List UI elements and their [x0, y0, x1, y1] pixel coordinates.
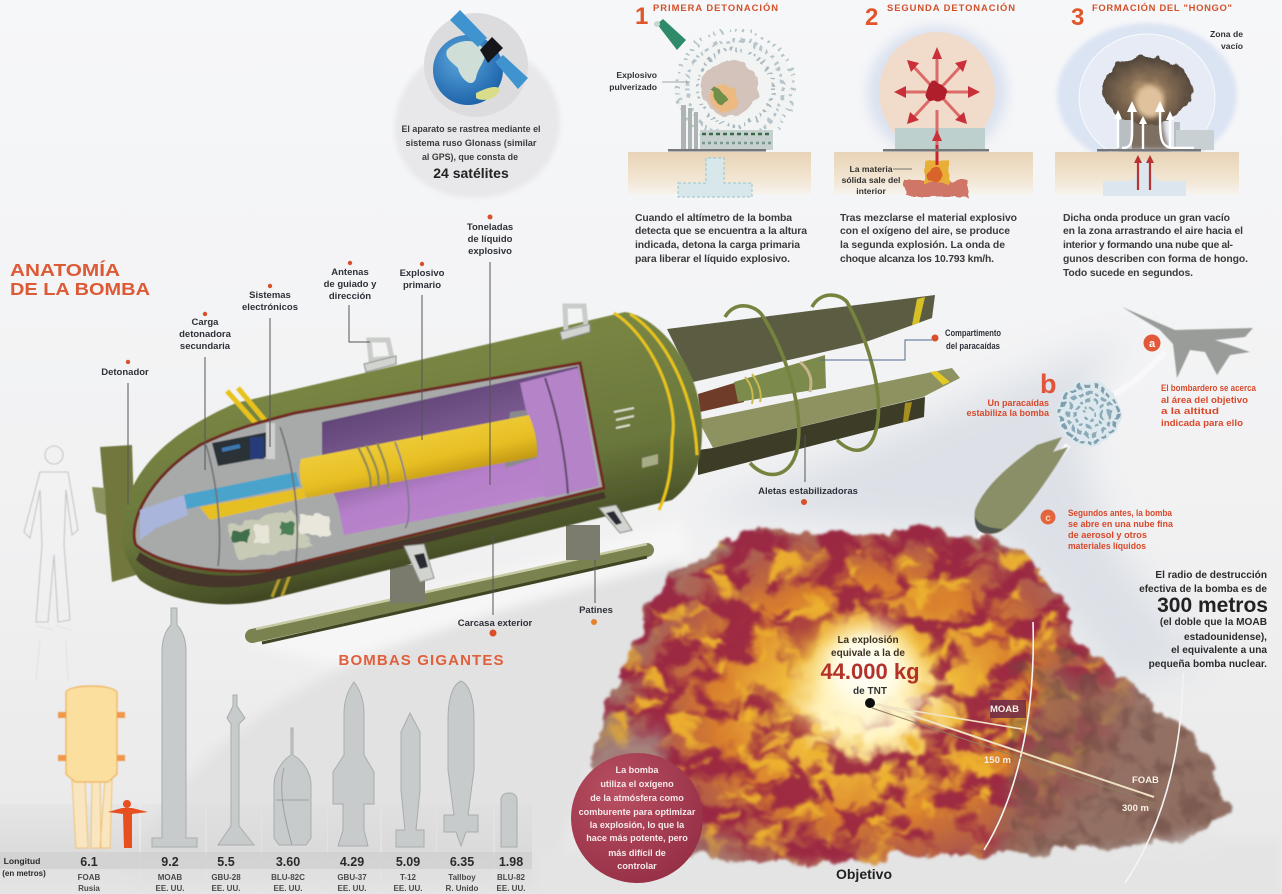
label: zona de vacío: Zona de — [1210, 29, 1243, 39]
text b: estabiliza la bomba — [966, 408, 1050, 418]
table labels: GBU-28 — [211, 873, 241, 882]
explosion text — [820, 635, 920, 697]
title: ANATOMÍA — [10, 259, 120, 280]
callout: radius of destruction: 300 metros — [1157, 594, 1268, 617]
underground vacuum — [1103, 155, 1186, 196]
callout: oxygen disc: La bomba — [616, 765, 659, 775]
text a: a la altitud — [1161, 406, 1219, 416]
bomb: small — [501, 793, 517, 847]
table labels: Rusia — [78, 884, 100, 893]
table labels: 6.1 — [80, 855, 98, 869]
ground section — [1055, 152, 1239, 195]
text: segunda detonación: Tras mezclarse el material explosivo — [840, 213, 1017, 224]
satellite text: El aparato se rastrea mediante el — [402, 123, 540, 134]
satellite text — [402, 123, 540, 181]
text a: al área del objetivo — [1161, 395, 1249, 405]
text: formación del hongo: en la zona arrastrando el aire hacia el — [1063, 226, 1243, 237]
callout: radius of destruction: El radio de destrucción — [1155, 570, 1267, 581]
base haze — [590, 830, 1230, 870]
text: formación del hongo: interior y formando una nube que al- — [1063, 240, 1234, 251]
text c — [1068, 508, 1174, 551]
text b — [966, 398, 1050, 418]
table labels: EE. UU. — [338, 884, 366, 893]
heading 2: 2 — [865, 4, 878, 31]
label: zona de vacío: vacío — [1221, 41, 1243, 51]
bomb: inner wall band — [136, 492, 606, 587]
panel: formación del hongo — [1055, 2, 1248, 279]
label: toneladas: Toneladas — [467, 222, 513, 233]
label: objetivo: Objetivo — [836, 866, 892, 882]
label: explosivo pulverizado — [609, 70, 690, 92]
tail: central tube — [698, 380, 744, 412]
callout: oxygen disc: de la atmósfera como — [590, 793, 684, 803]
callouts: bomb parts — [101, 214, 1001, 636]
label: toneladas: de líquido — [468, 234, 513, 245]
text a: El bombardero se acerca — [1161, 383, 1257, 393]
table labels: EE. UU. — [497, 884, 525, 893]
bomb: GBU-43 style — [333, 682, 374, 846]
text: primera detonación: para liberar el líquido explosivo. — [635, 254, 790, 265]
text: formación del hongo: Todo sucede en segundos. — [1063, 268, 1193, 279]
label: toneladas — [467, 214, 513, 257]
table labels — [2, 855, 526, 893]
title — [10, 259, 150, 299]
label: antenas: Antenas — [331, 267, 369, 278]
bomb: ribs — [206, 427, 297, 566]
label: aletas — [758, 486, 858, 505]
explosion text: de TNT — [853, 686, 887, 697]
blast core — [804, 608, 928, 732]
text: segunda detonación: la segunda explosión. La onda de — [840, 240, 1005, 251]
tail: lower fin — [698, 368, 960, 448]
table labels: T-12 — [400, 873, 417, 882]
illustration: explosion — [589, 522, 1234, 884]
label: antenas: dirección — [329, 291, 371, 302]
bomb: FOAB — [58, 686, 125, 848]
panel: primera detonación — [609, 2, 811, 265]
underground bunker — [678, 158, 752, 197]
bomb: lugs — [364, 306, 632, 582]
ground section — [834, 152, 1033, 195]
bombas gigantes comparison — [0, 608, 532, 894]
table labels: Longitud — [4, 856, 40, 866]
underground blast — [905, 160, 969, 197]
label: carga detonadora: secundaria — [180, 341, 231, 352]
label: toneladas: explosivo — [468, 246, 512, 257]
panel: segunda detonación — [834, 2, 1033, 265]
text: segunda detonación: choque alcanza los 10.793 km/h. — [840, 254, 994, 265]
text: segunda detonación — [840, 213, 1017, 265]
label: explosivo pulverizado: Explosivo — [616, 70, 657, 80]
table labels: BLU-82C — [271, 873, 305, 882]
label: materia: La materia — [850, 164, 893, 174]
heading 3: FORMACIÓN DEL "HONGO" — [1092, 2, 1232, 13]
badge c: c — [1045, 513, 1051, 524]
heading 2 — [865, 2, 1015, 31]
table labels: 1.98 — [499, 855, 523, 869]
table labels: 3.60 — [276, 855, 300, 869]
bomb: nose plate — [100, 445, 136, 582]
illustration: fireball with shock arrows — [867, 26, 1007, 190]
text: formación del hongo: Dicha onda produce un gran vacío — [1063, 213, 1230, 224]
title: DE LA BOMBA — [10, 279, 150, 299]
table labels: 4.29 — [340, 855, 364, 869]
callout: oxygen disc: comburente para optimizar — [579, 807, 696, 817]
label: patines — [579, 605, 613, 625]
label: carga detonadora: detonadora — [179, 329, 232, 340]
bomb: T-12 — [396, 713, 424, 847]
satellite text: 24 satélites — [433, 165, 509, 181]
radius labels: 300 m — [1122, 803, 1149, 814]
pale disc behind satellite text — [395, 42, 560, 198]
illustration: stabilizer tail — [667, 295, 960, 475]
label: explosivo primario: Explosivo — [400, 268, 445, 279]
bomb: rear markings — [614, 408, 634, 428]
text c: de aerosol y otros — [1068, 530, 1147, 540]
bomb: MOAB — [152, 608, 197, 847]
label: explosivo pulverizado: pulverizado — [609, 82, 657, 92]
table labels: GBU-37 — [337, 873, 367, 882]
satellite text: al GPS), que consta de — [422, 151, 518, 162]
illustration: skid rail — [252, 525, 647, 643]
heading 3: 3 — [1071, 4, 1084, 31]
buildings — [681, 105, 773, 150]
table labels: (en metros) — [2, 869, 46, 878]
table labels: FOAB — [78, 873, 101, 882]
text a — [1161, 383, 1257, 428]
heading: BOMBAS GIGANTES — [338, 652, 504, 669]
icon: satellite — [450, 10, 528, 89]
bomb: cutaway interior — [134, 363, 604, 571]
table labels: EE. UU. — [156, 884, 184, 893]
bomb: rear yellow bands — [614, 313, 673, 510]
text: primera detonación: Cuando el altímetro de la bomba — [635, 213, 792, 224]
explosion text: 44.000 kg — [820, 659, 920, 684]
callout: oxygen disc — [571, 753, 703, 883]
heading 2: SEGUNDA DETONACIÓN — [887, 2, 1015, 13]
table labels: 5.5 — [217, 855, 235, 869]
label: aletas: Aletas estabilizadoras — [758, 486, 858, 497]
callout: radius of destruction: pequeña bomba nuclear. — [1149, 659, 1267, 670]
illustration: aerosol cloud — [675, 30, 795, 146]
label: materia — [842, 164, 912, 196]
ground section — [628, 152, 811, 195]
badge a: a — [1149, 338, 1156, 350]
heading 1: PRIMERA DETONACIÓN — [653, 2, 778, 13]
text c: Segundos antes, la bomba — [1068, 508, 1173, 518]
icon: human scale silhouette — [24, 446, 78, 680]
illustration: bomb cutaway — [92, 306, 702, 604]
label: sistemas electrónicos: electrónicos — [242, 302, 298, 313]
radius labels: FOAB — [1132, 775, 1159, 786]
table labels: BLU-82 — [497, 873, 526, 882]
table labels: R. Unido — [446, 884, 479, 893]
callout: oxygen disc: utiliza el oxígeno — [600, 779, 674, 789]
label: explosivo primario: primario — [403, 280, 441, 291]
icon: globe — [424, 13, 528, 117]
illustration: vacuum zone and smoke cloud — [1057, 23, 1237, 167]
badge c — [1040, 510, 1056, 524]
table labels: EE. UU. — [274, 884, 302, 893]
label: materia: sólida sale del — [842, 175, 900, 185]
callout: radius of destruction — [1139, 570, 1268, 670]
callout: radius of destruction: el equivalente a una — [1171, 645, 1267, 656]
heading 1: 1 — [635, 3, 648, 30]
label: detonador: Detonador — [101, 367, 149, 378]
bomb: lower electronics — [226, 510, 330, 560]
explosion text: equivale a la de — [831, 648, 905, 659]
text a: indicada para ello — [1161, 418, 1244, 428]
icon: orange human — [108, 800, 148, 848]
radius lines — [872, 704, 1154, 803]
tail: rings — [725, 295, 878, 474]
tail: upper fin — [667, 295, 935, 382]
badge a — [1144, 334, 1160, 352]
bomb: purple charge chamber — [322, 366, 598, 535]
table labels: MOAB — [158, 873, 182, 882]
table labels: 9.2 — [161, 855, 179, 869]
text c: materiales líquidos — [1068, 541, 1146, 551]
callout: radius of destruction: efectiva de la bomba es de — [1139, 584, 1267, 595]
bomb: blue fuze tube — [183, 472, 300, 510]
callout: oxygen disc: la explosión, lo que la — [590, 820, 685, 830]
text: formación del hongo: gunos describen con forma de hongo. — [1063, 254, 1248, 265]
table labels: 6.35 — [450, 855, 474, 869]
label: patines: Patines — [579, 605, 613, 616]
centre point — [865, 698, 875, 708]
bomb: Tallboy — [444, 681, 478, 846]
leader lines — [128, 262, 932, 615]
label: antenas — [324, 261, 377, 302]
radius labels: MOAB — [990, 704, 1019, 715]
satellite text: sistema ruso Glonass (similar — [406, 137, 537, 148]
text: segunda detonación: con el oxígeno del aire, se produce — [840, 226, 1010, 237]
table labels: 5.09 — [396, 855, 420, 869]
bomb: front yellow bands — [227, 388, 268, 428]
drop sequence — [966, 307, 1257, 551]
label: compartimento — [932, 328, 1001, 352]
satellite panel: GPS constellation — [395, 10, 560, 198]
bomb: outer shell — [122, 312, 702, 604]
icon: canister — [654, 19, 686, 50]
label: carcasa: Carcasa exterior — [458, 618, 533, 629]
label: carga detonadora: Carga — [192, 317, 219, 328]
label: sistemas electrónicos: Sistemas — [249, 290, 291, 301]
callout: radius of destruction: estadounidense), — [1184, 632, 1267, 643]
table labels: EE. UU. — [394, 884, 422, 893]
radius labels — [984, 700, 1159, 814]
icon: plane — [1122, 307, 1253, 378]
callout: oxygen disc: más difícil de — [608, 848, 666, 858]
radius labels: 150 m — [984, 755, 1011, 766]
table labels: EE. UU. — [212, 884, 240, 893]
label: materia: interior — [856, 186, 886, 196]
label: detonador — [101, 360, 149, 378]
text: primera detonación: detecta que se encuentra a la altura — [635, 226, 807, 237]
text: formación del hongo — [1063, 213, 1248, 279]
heading 3 — [1071, 2, 1232, 31]
bomb: electronics bay — [212, 423, 275, 466]
callout: radius of destruction: (el doble que la MOAB — [1160, 617, 1267, 628]
label: sistemas electrónicos — [242, 284, 298, 313]
label: compartimento: del paracaídas — [946, 341, 1000, 352]
icon: falling bomb — [975, 437, 1068, 534]
icon: parachute — [1057, 382, 1121, 446]
text b: Un paracaídas — [987, 398, 1049, 408]
label: explosivo primario — [400, 262, 445, 291]
table labels: Tallboy — [448, 873, 476, 882]
bomb: yellow explosive core — [505, 410, 538, 468]
callout: oxygen disc: controlar — [617, 861, 657, 871]
text c: se abre en una nube fina — [1068, 519, 1174, 529]
text: primera detonación — [635, 213, 807, 265]
white targeting arc — [984, 622, 1183, 883]
heading 1 — [635, 2, 778, 30]
table column bands — [0, 804, 532, 894]
label: carcasa — [458, 618, 533, 636]
bomb: BLU-82 — [274, 728, 311, 845]
label: zona de vacío — [1210, 29, 1243, 51]
badge b: b — [1040, 369, 1056, 399]
label: antenas: de guiado y — [324, 279, 377, 290]
label: carga detonadora — [179, 312, 232, 352]
label: compartimento: Compartimento — [945, 328, 1001, 339]
trail — [972, 352, 1165, 550]
text: primera detonación: indicada, detona la carga primaria — [635, 240, 800, 251]
callout: oxygen disc: hace más potente, pero — [586, 833, 688, 843]
explosion text: La explosión — [837, 635, 899, 646]
bomb: GBU — [218, 695, 254, 845]
